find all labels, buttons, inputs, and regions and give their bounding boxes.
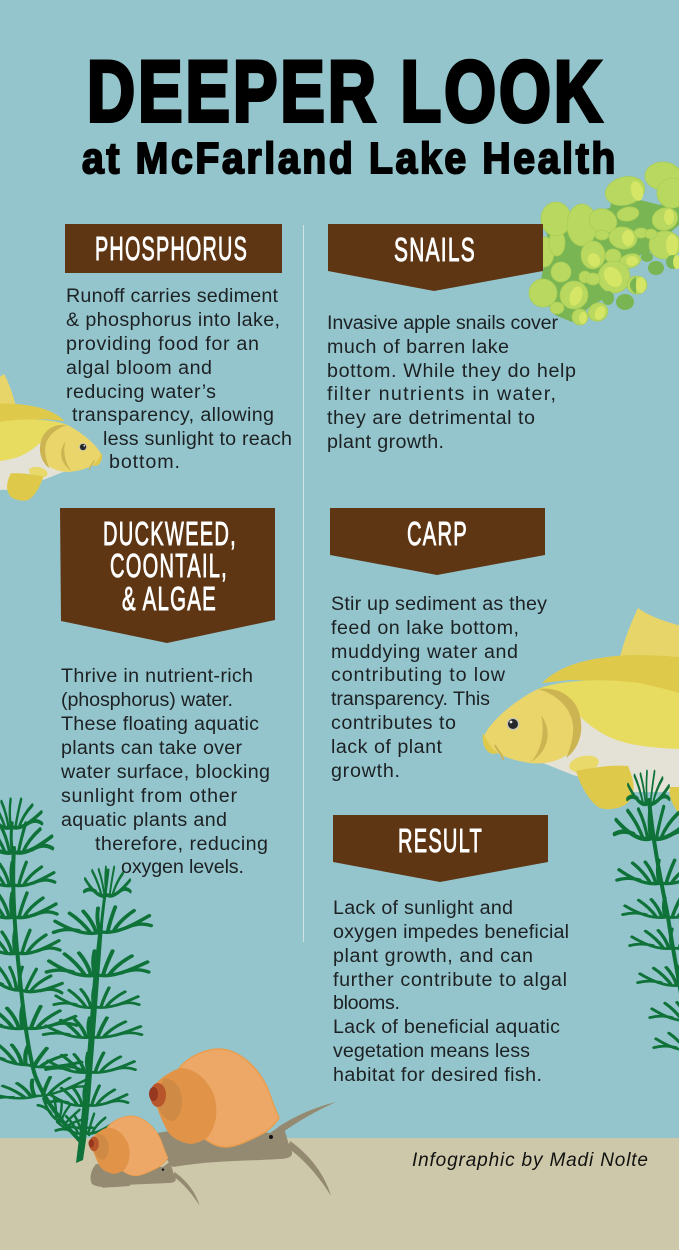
text: result body: vegetation means less xyxy=(333,1040,530,1062)
text: duckweed body: Thrive in nutrient-rich xyxy=(61,665,253,687)
text: phosphorus body: less sunlight to reach xyxy=(103,428,292,450)
text: snails body: they are detrimental to xyxy=(327,407,535,429)
text: result body: Lack of beneficial aquatic xyxy=(333,1016,560,1038)
text: phosphorus body: Runoff carries sediment xyxy=(66,285,279,307)
text: duckweed body: water surface, blocking xyxy=(60,761,270,783)
text: snails body: plant growth. xyxy=(327,431,444,453)
text: phosphorus body: & phosphorus into lake, xyxy=(66,309,280,331)
credit line: Infographic by Madi Nolte xyxy=(412,1150,648,1171)
text: duckweed body: sunlight from other xyxy=(61,785,237,807)
heading banner: carp: CARP xyxy=(407,515,468,552)
text: snails body: bottom. While they do help xyxy=(327,360,576,382)
heading banner: duckweed: COONTAIL, xyxy=(110,547,228,584)
panel: carp xyxy=(330,508,547,782)
heading banner: snails xyxy=(328,224,543,291)
text: result body: oxygen impedes beneficial xyxy=(333,921,569,943)
text: carp body: contributes to xyxy=(331,712,456,734)
text: carp body: Stir up sediment as they xyxy=(331,593,547,615)
text: carp body: muddying water and xyxy=(331,641,518,663)
text: duckweed body: These floating aquatic xyxy=(61,713,259,735)
panel: result xyxy=(333,815,569,1086)
text: result body: plant growth, and can xyxy=(333,945,533,967)
text: phosphorus body: bottom. xyxy=(109,451,180,473)
heading banner: result: RESULT xyxy=(398,822,483,859)
text: phosphorus body: transparency, allowing xyxy=(72,404,274,426)
text: carp body: transparency. This xyxy=(331,688,490,710)
heading banner: snails: SNAILS xyxy=(394,231,476,268)
text: carp body: feed on lake bottom, xyxy=(331,617,519,639)
text: snails body: filter nutrients in water, xyxy=(327,383,556,405)
heading banner: phosphorus xyxy=(65,224,282,273)
heading banner: duckweed: & ALGAE xyxy=(122,580,217,617)
heading banner: duckweed: DUCKWEED, xyxy=(103,515,237,552)
panel: duckweed, coontail and algae xyxy=(60,508,275,878)
icon: duckweed cluster xyxy=(529,162,679,325)
text: phosphorus body: reducing water’s xyxy=(66,381,216,403)
text: result body: habitat for desired fish. xyxy=(333,1064,542,1086)
text: carp body: growth. xyxy=(331,760,400,782)
heading banner: result xyxy=(333,815,548,882)
text: snails body xyxy=(327,312,576,453)
text: duckweed body: plants can take over xyxy=(61,737,242,759)
icon: small apple snail xyxy=(89,1116,203,1206)
text: duckweed body: (phosphorus) water. xyxy=(61,689,233,711)
text: carp body: contributing to low xyxy=(331,664,506,686)
text: result body: Lack of sunlight and xyxy=(333,897,513,919)
icon: large carp at right edge xyxy=(483,608,679,830)
text: snails body: much of barren lake xyxy=(327,336,509,358)
lake bottom sediment xyxy=(0,1138,679,1250)
center divider xyxy=(303,225,304,942)
icon: left coontail plant xyxy=(0,799,98,1143)
text: phosphorus body: algal bloom and xyxy=(66,357,212,379)
text: duckweed body xyxy=(60,665,270,878)
heading banner: carp xyxy=(330,508,545,575)
text: duckweed body: therefore, reducing xyxy=(95,833,268,855)
text: phosphorus body xyxy=(66,285,292,473)
panel: snails xyxy=(327,224,576,453)
text: result body: blooms. xyxy=(333,992,400,1014)
title xyxy=(82,44,618,183)
icon: small carp at left edge xyxy=(0,374,102,514)
icon: right coontail plant xyxy=(614,772,679,1051)
text: carp body: lack of plant xyxy=(331,736,443,758)
text: carp body xyxy=(331,593,547,782)
text: duckweed body: aquatic plants and xyxy=(61,809,227,831)
heading banner: phosphorus: PHOSPHORUS xyxy=(95,230,248,267)
text: result body: further contribute to algal xyxy=(333,969,567,991)
text: snails body: Invasive apple snails cover xyxy=(327,312,558,334)
text: duckweed body: oxygen levels. xyxy=(121,856,244,878)
title: at McFarland Lake Health xyxy=(82,134,618,183)
panel: phosphorus xyxy=(65,224,292,473)
icon: middle coontail plant xyxy=(44,867,151,1163)
icon: large apple snail xyxy=(149,1049,336,1196)
text: result body xyxy=(333,897,569,1086)
heading banner: duckweed xyxy=(60,508,275,643)
text: phosphorus body: providing food for an xyxy=(66,333,259,355)
